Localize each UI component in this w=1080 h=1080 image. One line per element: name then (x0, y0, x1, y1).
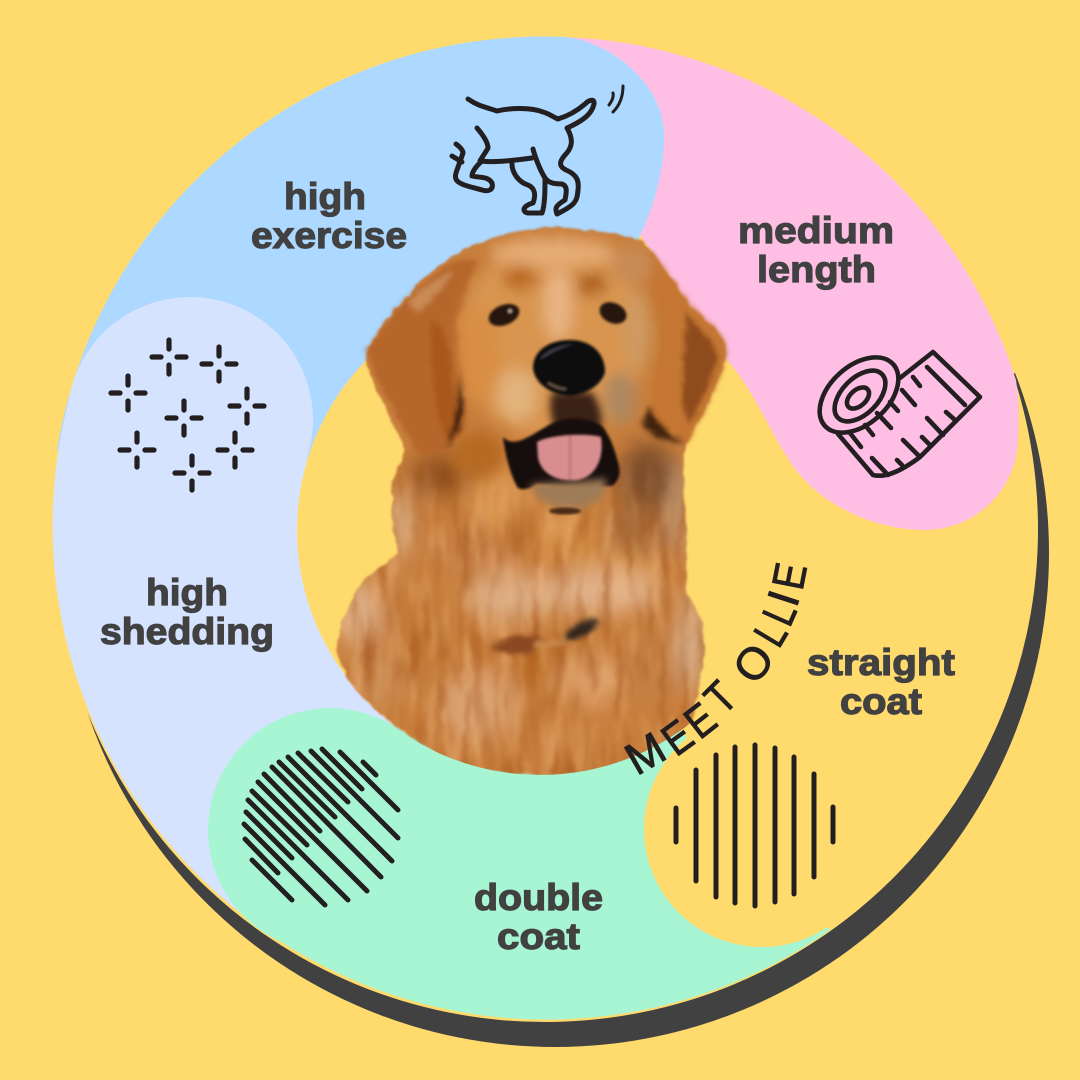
mouth (503, 419, 620, 489)
dog left ear (367, 259, 477, 454)
label: double coat: double (474, 877, 603, 918)
fur strand texture (342, 467, 706, 774)
curved title: meet ollie: O (723, 634, 784, 693)
curved title: meet ollie: M (616, 722, 674, 785)
curved title: meet ollie: I (757, 584, 810, 612)
nose (533, 340, 605, 396)
dog photo illustration (320, 228, 727, 780)
dog right ear (642, 250, 727, 445)
label: high shedding: high (146, 572, 228, 613)
label: high shedding (100, 572, 274, 652)
disc drop shadow (88, 373, 1049, 1047)
label: high exercise: exercise (251, 215, 407, 256)
centre hole (297, 287, 783, 773)
curved title: meet ollie: T (694, 671, 746, 723)
segment: medium length (565, 37, 1019, 530)
collar (490, 620, 600, 654)
label: straight coat (807, 642, 955, 722)
curved title: meet ollie: L (752, 594, 807, 633)
dog face (452, 238, 652, 479)
segment bulb: high shedding (67, 297, 313, 543)
curved title: meet ollie: E (675, 692, 726, 748)
label: double coat: coat (497, 916, 580, 957)
curved title: meet ollie: E (762, 559, 817, 593)
shading between nose and mouth (550, 392, 602, 430)
curved title: meet ollie: L (744, 612, 797, 655)
icon: shedding sparkles (111, 340, 264, 490)
tongue (537, 435, 602, 480)
label: straight coat: coat (840, 681, 922, 722)
label: straight coat: straight (807, 642, 955, 683)
curved title: meet ollie (616, 559, 817, 785)
segment bulb: double coat (208, 708, 452, 952)
segment bulb: straight coat (644, 711, 880, 947)
icon: straight coat vertical lines (676, 745, 833, 906)
left eye (486, 302, 522, 328)
label: medium length: medium (738, 210, 894, 251)
segment: high exercise (57, 37, 664, 530)
label: medium length (738, 210, 894, 290)
icon: wagging dog (452, 86, 623, 214)
chin (530, 478, 606, 508)
label: high exercise: high (284, 176, 366, 217)
label: medium length: length (757, 249, 876, 290)
label: double coat (474, 877, 603, 957)
segment: double coat (243, 530, 830, 1020)
segment: high shedding (53, 382, 540, 915)
curved title: meet ollie: E (652, 709, 702, 765)
icon: double coat diagonal lines (244, 749, 398, 905)
icon: measuring tape (805, 343, 980, 476)
shadow under chin (549, 508, 581, 514)
dog coat, ears and head fur (320, 228, 727, 780)
label: high shedding: shedding (100, 611, 274, 652)
label: high exercise (251, 176, 407, 256)
right eye (598, 300, 628, 326)
